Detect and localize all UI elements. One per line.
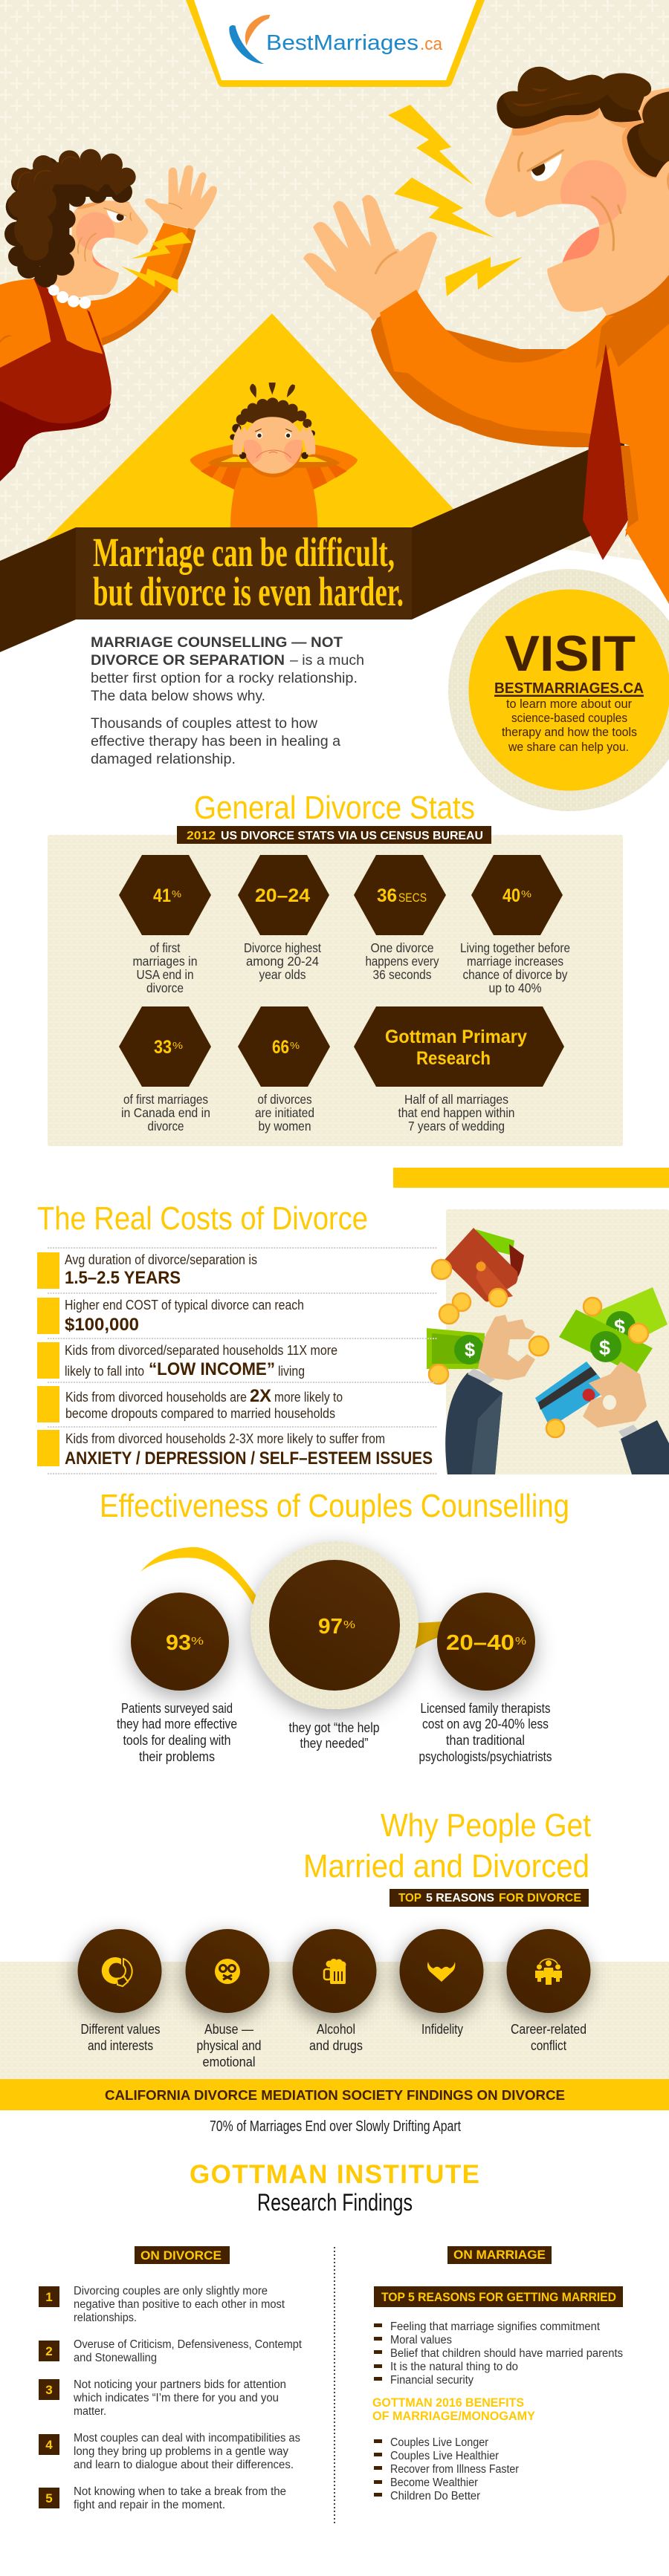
woman's face: [52, 201, 148, 299]
woman's hair: [4, 157, 132, 287]
caption: patients: tools for dealing with: [123, 1733, 230, 1748]
stat: 66%: 66: [272, 1037, 289, 1058]
finding 2: and Stonewalling: [74, 2352, 157, 2364]
cost: dropouts: more likely to: [274, 1390, 343, 1405]
heading: Why People Get Married and Divorced: Why People Get: [381, 1807, 591, 1844]
man's face: [485, 88, 669, 316]
list: reasons for marriage: Financial security: [390, 2374, 474, 2387]
caption: patients: they had more effective: [117, 1717, 237, 1731]
reason: career: Career-related: [511, 2022, 586, 2037]
stat: 20-24: among 20-24: [246, 954, 319, 969]
stat: 40%: chance of divorce by: [462, 967, 568, 982]
logo: BestMarriages.ca: [229, 15, 443, 64]
man's necktie: [583, 344, 628, 560]
finding 4: long they bring up problems in a gentle way: [74, 2445, 288, 2458]
circle: 20-40%: 20–40: [446, 1631, 514, 1655]
patterned header background: [0, 0, 669, 565]
child's head: [244, 415, 303, 474]
logo: BestMarriages.ca: BestMarriages: [266, 31, 418, 55]
stat: 40%: 40: [502, 885, 520, 906]
cost: duration: [37, 1252, 257, 1289]
icon: bills: $: [465, 1339, 476, 1361]
reason: alcohol: [293, 1929, 376, 2053]
list: benefits: Become Wealthier: [390, 2476, 478, 2489]
heading: The Real Costs of Divorce: The Real Costs of Divorce: [37, 1200, 368, 1237]
stat: 41%: divorce: [146, 980, 184, 995]
cost: money: [37, 1298, 304, 1335]
banner: census bureau: 2012: [187, 830, 216, 842]
list: reasons for marriage: [374, 2320, 623, 2387]
stat: 36 secs: SECS: [398, 891, 427, 905]
logo plate: [186, 0, 485, 87]
banner: top 5 reasons for getting married: TOP 5 REASONS FOR GETTING MARRIED: [381, 2290, 616, 2304]
reason: alcohol: Alcohol: [317, 2022, 355, 2037]
reason: infidelity: [400, 1929, 483, 2037]
man's hand: [303, 195, 437, 321]
panel: money illustration: [427, 1209, 669, 1474]
column: on marriage: [372, 2246, 623, 2502]
heading: Why People Get Married and Divorced: [303, 1807, 591, 1884]
icon: coins: [432, 1260, 507, 1324]
banner: on divorce: ON DIVORCE: [140, 2248, 222, 2263]
woman's necklace: [48, 284, 91, 309]
icon: three people: [535, 1959, 562, 1985]
stat: Gottman Primary Research: Gottman Primary: [385, 1027, 527, 1047]
column: on divorce: [39, 2246, 303, 2511]
column divider: [334, 2247, 335, 2523]
circle: 93%: %: [191, 1635, 204, 1648]
icon: horned heart: [427, 1962, 455, 1982]
caption: help: [288, 1720, 379, 1751]
finding 4: [39, 2432, 300, 2471]
stat: 33%: divorce: [147, 1119, 184, 1133]
finding 4: Most couples can deal with incompatibilities as: [74, 2432, 300, 2445]
list: reasons for marriage: Moral values: [390, 2334, 452, 2346]
stat: 66%: %: [290, 1040, 300, 1051]
stat: 40%: Living together before: [460, 940, 570, 955]
cost: duration: Avg duration of divorce/separation is: [65, 1252, 257, 1267]
icon: right sleeve and hand: [583, 1362, 669, 1474]
finding 2: 2: [45, 2344, 53, 2358]
yellow triangle behind child: [37, 313, 476, 550]
banner: top 5 reasons for divorce: TOP: [398, 1892, 421, 1905]
stat: 41%: [119, 855, 211, 995]
cost: dropouts: become dropouts compared to married households: [65, 1406, 335, 1421]
finding 5: [39, 2485, 286, 2511]
stat: 40%: up to 40%: [489, 980, 541, 995]
stat: 40%: marriage increases: [467, 954, 563, 969]
band: California findings: CALIFORNIA DIVORCE MEDIATION SOCIETY FINDINGS ON DIVORCE: [105, 2088, 565, 2103]
circle: 93%: 93: [166, 1631, 191, 1655]
finding 3: matter.: [74, 2405, 106, 2418]
icon: wallet: [444, 1228, 524, 1301]
intro text: Thousands of couples attest to how: [91, 716, 317, 732]
panel: general divorce stats: [48, 826, 623, 1146]
cost: money: $100,000: [65, 1315, 139, 1335]
caption: therapists: cost on avg 20-40% less: [422, 1717, 549, 1731]
intro text: [91, 635, 364, 767]
stat: 20-24: 20–24: [255, 885, 310, 906]
intro text: MARRIAGE COUNSELLING — NOT: [91, 635, 343, 651]
reason: alcohol: and drugs: [309, 2038, 363, 2053]
caption: therapists: Licensed family therapists: [421, 1701, 550, 1716]
finding 4: 4: [45, 2438, 53, 2452]
caption: help: they got “the help: [288, 1720, 379, 1735]
intro text: DIVORCE OR SEPARATION: [91, 653, 285, 669]
stat: 33%: [119, 1006, 211, 1133]
list: reasons for marriage: Belief that children should have married parents: [390, 2347, 623, 2360]
banner: on marriage: [447, 2246, 552, 2264]
icon: left sleeve and hand: [445, 1315, 535, 1474]
circle: 97%: %: [343, 1619, 355, 1631]
circle: 93%: [131, 1593, 229, 1691]
caption: patients: their problems: [139, 1749, 215, 1764]
stat: 66%: [238, 1006, 330, 1133]
caption: patients: Patients surveyed said: [121, 1701, 233, 1716]
reason: abuse: physical and: [196, 2038, 262, 2053]
cost: low income: “LOW INCOME”: [149, 1359, 275, 1379]
reason: values: [77, 1929, 162, 2053]
stat: 20-24: Divorce highest: [244, 940, 321, 955]
stat: 66%: by women: [259, 1119, 311, 1133]
list: benefits: Recover from Illness Faster: [390, 2463, 519, 2476]
stat: 20-24: [238, 855, 329, 982]
intro text: effective therapy has been in healing a: [91, 734, 340, 749]
banner: census bureau: US DIVORCE STATS VIA US CENSUS BUREAU: [221, 830, 483, 842]
stat: Gottman Primary Research: that end happen within: [398, 1105, 514, 1120]
stat: 40%: [460, 855, 570, 995]
stat: Gottman Primary Research: [354, 1006, 564, 1133]
icon: beer mug: [324, 1959, 346, 1984]
caption: patients: [117, 1701, 237, 1764]
finding 5: 5: [45, 2491, 53, 2505]
stat: 36 secs: One divorce: [370, 940, 434, 955]
banner: top 5 reasons for divorce: FOR DIVORCE: [499, 1892, 581, 1905]
circle: 97%: [251, 1541, 418, 1709]
list: benefits: Children Do Better: [390, 2490, 480, 2502]
banner: on marriage: ON MARRIAGE: [453, 2248, 546, 2262]
stat: 33%: %: [172, 1040, 184, 1051]
icon: ring: [102, 1957, 132, 1986]
visit callout: [448, 569, 669, 811]
finding 3: Not noticing your partners bids for attention: [74, 2378, 286, 2391]
finding 5: fight and repair in the moment.: [74, 2499, 225, 2511]
circle: 20-40%: [437, 1593, 535, 1691]
caption: help: they needed”: [300, 1736, 369, 1751]
stat: 41%: USA end in: [137, 967, 193, 982]
reason: abuse: [186, 1929, 269, 2069]
icon: gagged face: [215, 1959, 240, 1984]
reason: career: [507, 1929, 590, 2053]
finding text: 70% of Marriages End over Slowly Drifting Apart: [210, 2118, 461, 2135]
cost: low income: Kids from divorced/separated households 11X more: [65, 1343, 337, 1358]
logo: BestMarriages.ca: .ca: [420, 34, 443, 54]
headline banner: [76, 527, 412, 619]
finding 1: [39, 2285, 285, 2324]
caption: therapists: psychologists/psychiatrists: [419, 1749, 552, 1764]
list: benefits: Couples Live Longer: [390, 2436, 488, 2449]
reason: infidelity: Infidelity: [421, 2022, 463, 2037]
list: reasons for marriage: It is the natural thing to do: [390, 2361, 518, 2373]
subheading: Gottman 2016 benefits: OF MARRIAGE/MONOGAMY: [372, 2409, 536, 2423]
finding 3: which indicates “I’m there for you and you: [73, 2392, 279, 2404]
stat: Gottman Primary Research: 7 years of wedding: [408, 1119, 505, 1133]
finding 1: relationships.: [74, 2312, 137, 2324]
intro text: better first option for a rocky relationship.: [91, 671, 358, 686]
visit callout: VISIT: [505, 625, 636, 682]
stat: 33%: of first marriages: [123, 1092, 208, 1107]
finding 2: Overuse of Criticism, Defensiveness, Contempt: [74, 2338, 303, 2351]
intro text: – is a much: [290, 653, 364, 669]
stat: 33%: in Canada end in: [121, 1105, 210, 1120]
cost: dropouts: 2X: [250, 1386, 271, 1406]
caption: therapists: than traditional: [446, 1733, 525, 1748]
stat: 41%: of first: [150, 940, 181, 955]
cost: dropouts: [37, 1386, 343, 1422]
cost: anxiety: ANXIETY / DEPRESSION / SELF–ESTEEM ISSUES: [65, 1448, 433, 1468]
visit callout: BESTMARRIAGES.CA: [494, 680, 644, 697]
heading: Why People Get Married and Divorced: Married and Divorced: [303, 1848, 589, 1884]
cost: low income: likely to fall into: [65, 1364, 144, 1379]
stat: 36 secs: 36: [377, 885, 397, 906]
finding 5: Not knowing when to take a break from the: [74, 2485, 286, 2498]
reason: abuse: emotional: [202, 2055, 256, 2069]
stat: Gottman Primary Research: Half of all marriages: [404, 1092, 508, 1107]
stat: 41%: %: [172, 888, 181, 900]
man's arm and torso: [371, 267, 669, 604]
stat: 36 secs: happens every: [366, 954, 439, 969]
woman's hand: [145, 165, 217, 229]
visit callout: to learn more about our: [506, 697, 632, 711]
list: benefits: [374, 2436, 519, 2502]
icon: more coins: [429, 1298, 648, 1437]
stat: 66%: of divorces: [257, 1092, 312, 1107]
icon: credit card: [535, 1362, 610, 1428]
intro text: The data below shows why.: [91, 689, 265, 704]
stat: 41%: 41: [153, 885, 171, 906]
man's lightning bolts: [388, 105, 523, 296]
man's hair: [497, 67, 651, 129]
cost: duration: 1.5–2.5 YEARS: [65, 1268, 181, 1288]
list: reasons for marriage: Feeling that marriage signifies commitment: [390, 2320, 601, 2333]
reason: values: and interests: [88, 2038, 153, 2053]
stat: 36 secs: 36 seconds: [373, 967, 432, 982]
list: real costs: [37, 1248, 437, 1474]
finding 1: 1: [45, 2290, 53, 2304]
caption: therapists: [419, 1701, 552, 1764]
list: benefits: Couples Live Healthier: [390, 2450, 499, 2462]
stat: 33%: 33: [154, 1037, 172, 1058]
stat: 20-24: year olds: [259, 967, 306, 982]
banner: top 5 reasons for divorce: 5 REASONS: [426, 1892, 494, 1905]
heading: General Divorce Stats: General Divorce Stats: [194, 790, 475, 826]
stat: Gottman Primary Research: Research: [416, 1048, 491, 1069]
visit callout: therapy and how the tools: [502, 726, 637, 739]
cost: low income: living: [278, 1364, 305, 1379]
banner: on divorce: [135, 2246, 230, 2264]
stat: 66%: are initiated: [255, 1105, 314, 1120]
icon: bills: $: [614, 1315, 625, 1339]
reasons row: [77, 1929, 590, 2069]
band: California findings: [0, 2079, 669, 2110]
icon: bills: $: [599, 1336, 610, 1359]
headline banner: Marriage can be difficult,: [93, 530, 395, 575]
banner: top 5 reasons for divorce: [390, 1889, 589, 1907]
visit callout: we share can help you.: [508, 741, 629, 754]
stat: 36 secs: [354, 855, 446, 982]
icon: bills: [427, 1287, 668, 1374]
finding 3: 3: [45, 2383, 53, 2397]
cost: money: Higher end COST of typical divorce can reach: [65, 1298, 304, 1313]
illustration: angry man: [303, 67, 669, 604]
cost: anxiety: [37, 1430, 433, 1468]
intro text: damaged relationship.: [91, 752, 236, 767]
finding 4: and learn to dialogue about their differences.: [74, 2459, 294, 2471]
cost: low income: [37, 1342, 337, 1379]
circle: 97%: 97: [318, 1615, 343, 1639]
reason: values: Different values: [80, 2022, 161, 2037]
circle: 20-40%: %: [515, 1635, 526, 1648]
woman's lightning bolts: [132, 232, 192, 258]
finding 1: Divorcing couples are only slightly more: [74, 2285, 268, 2297]
banner: top 5 reasons for getting married: [374, 2286, 623, 2307]
heading: Gottman Institute: [190, 2160, 479, 2216]
visit callout: science-based couples: [511, 712, 627, 725]
reason: abuse: Abuse —: [204, 2022, 253, 2037]
heading: Gottman Institute: GOTTMAN INSTITUTE: [190, 2160, 479, 2189]
stat: 41%: marriages in: [132, 954, 198, 969]
headline banner: but divorce is even harder.: [93, 569, 404, 614]
reason: career: conflict: [531, 2038, 566, 2053]
cream band: reasons: [0, 1962, 669, 2079]
subheading: Gottman 2016 benefits: GOTTMAN 2016 BENEFITS: [372, 2396, 524, 2410]
illustration: worried child: [190, 383, 358, 527]
heading: Effectiveness of Couples Counselling: Effectiveness of Couples Counselling: [100, 1488, 569, 1524]
child's stress marks: [250, 383, 295, 398]
subheading: Gottman 2016 benefits: [372, 2396, 536, 2423]
finding 2: [39, 2338, 303, 2364]
stat: 40%: %: [521, 888, 532, 900]
finding 3: [39, 2378, 286, 2418]
cost: anxiety: Kids from divorced households 2-3X more likely to suffer from: [65, 1431, 385, 1446]
brown ribbon band: [0, 434, 624, 652]
illustration: angry woman: [0, 149, 217, 481]
banner: census bureau: [177, 826, 491, 844]
cost: dropouts: Kids from divorced households are: [65, 1390, 247, 1405]
heading: Gottman Institute: Research Findings: [257, 2189, 413, 2216]
finding 1: negative than positive to each other in most: [74, 2298, 285, 2311]
chart: counselling effectiveness circles: [117, 1541, 552, 1764]
yellow accent bar: [393, 1168, 669, 1188]
